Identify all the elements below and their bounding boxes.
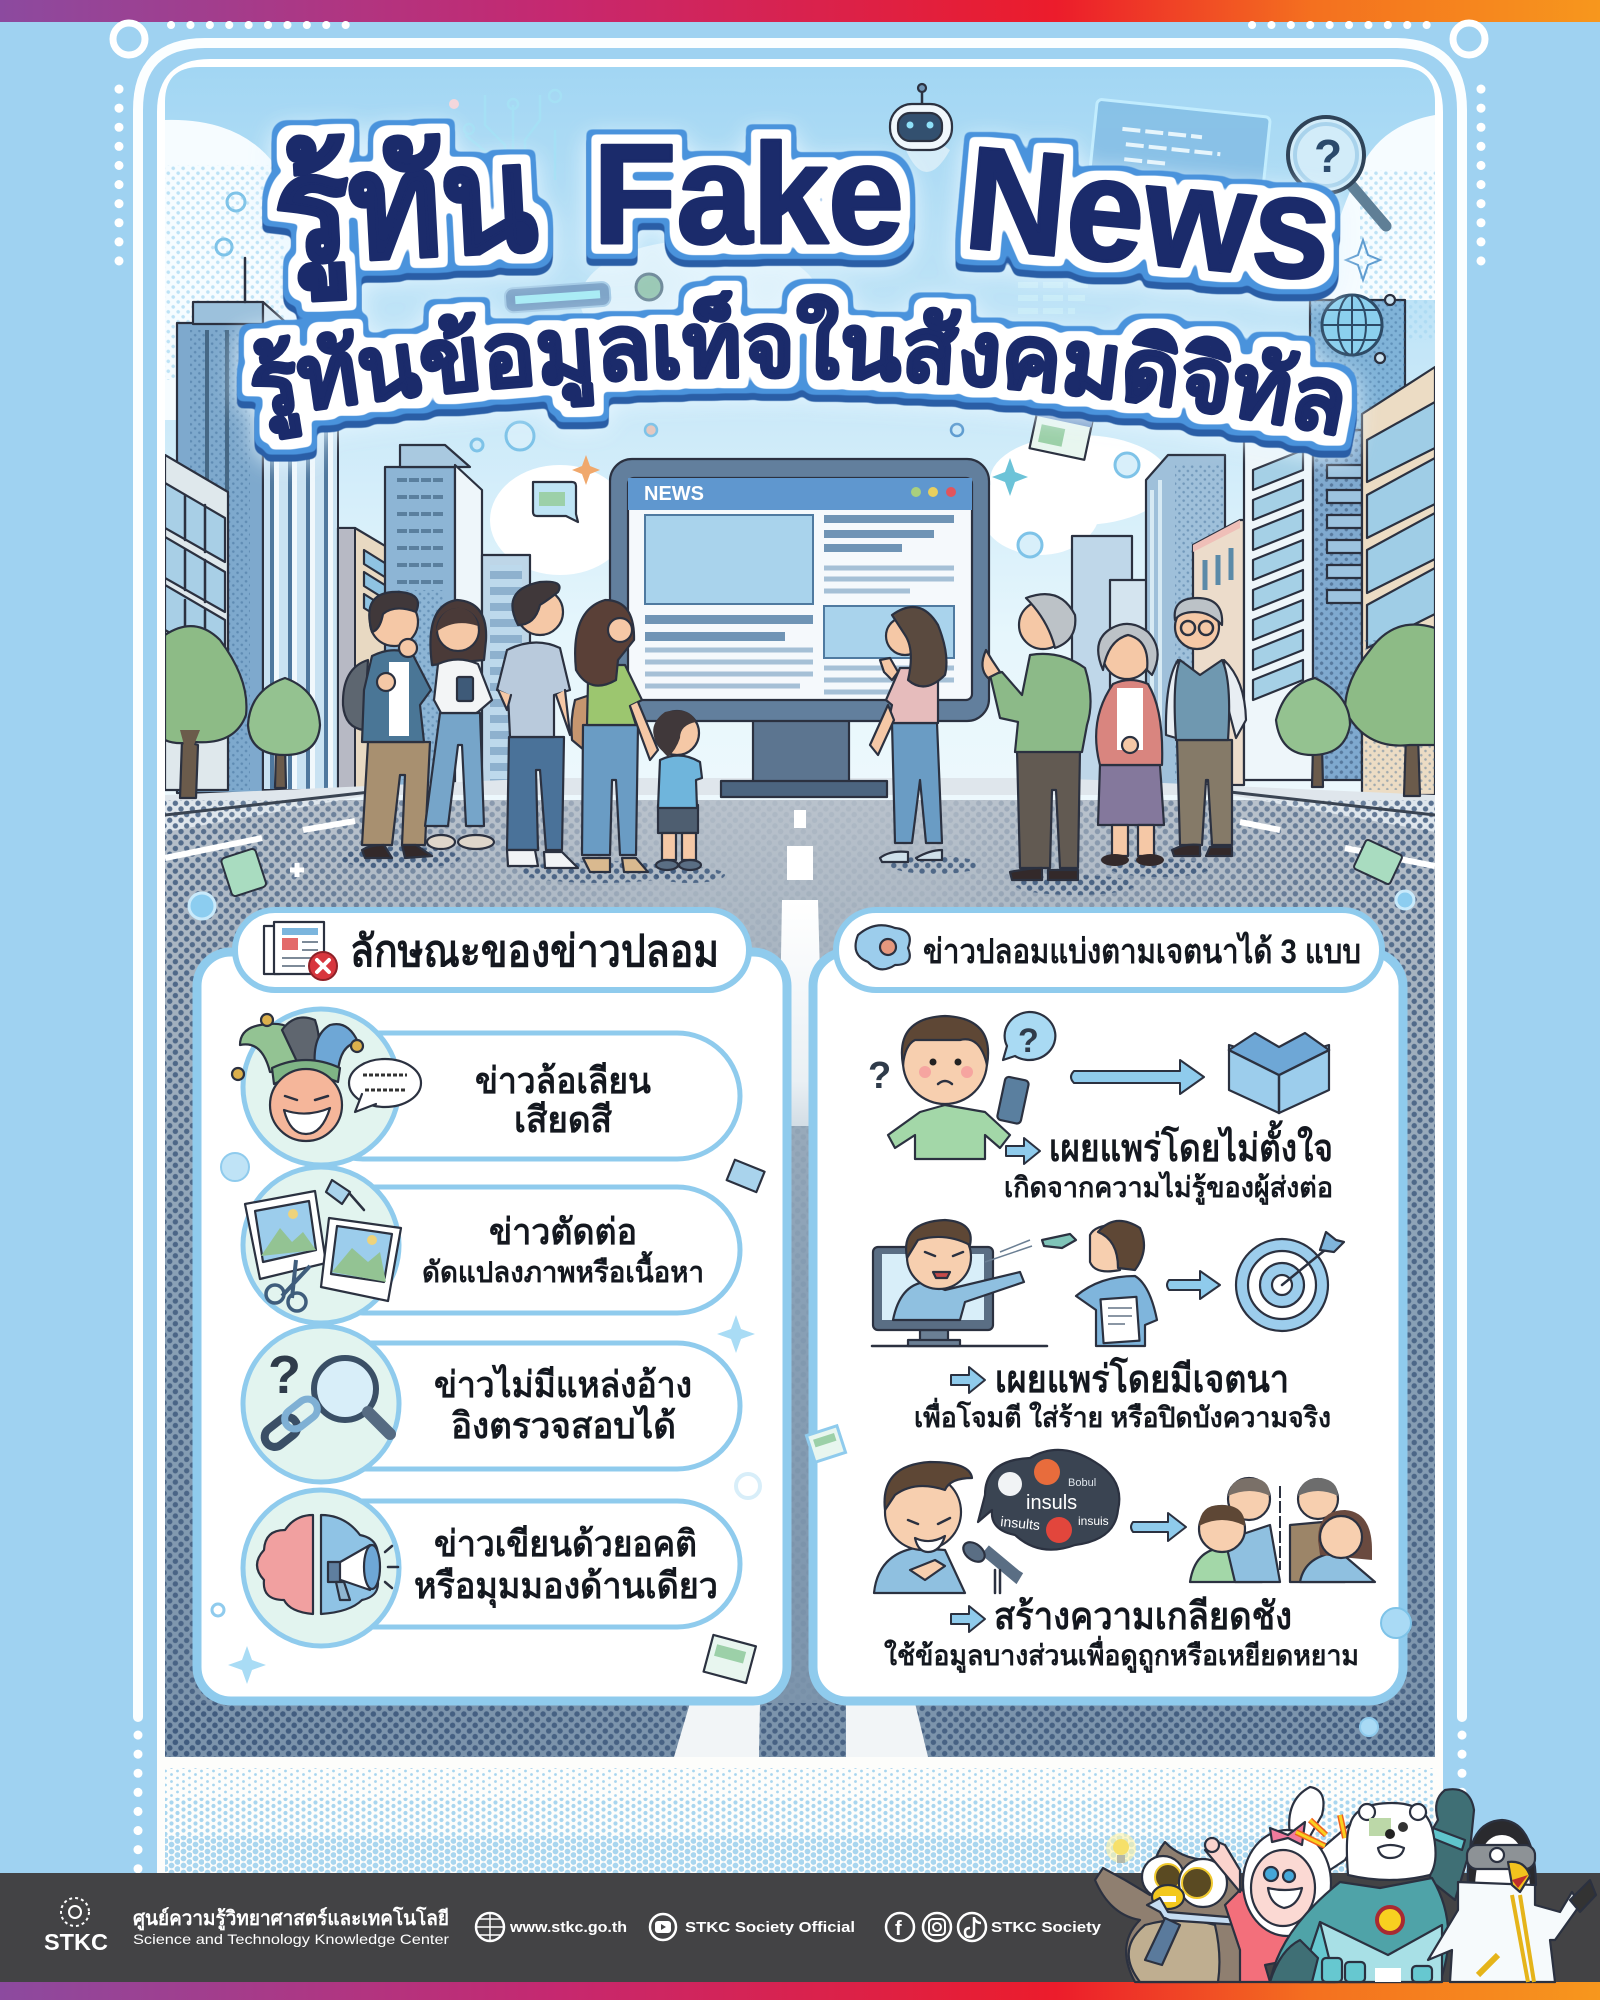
type 3 heading: สร้างความเกลียดชัง	[994, 1596, 1292, 1638]
boy smirking	[874, 1462, 972, 1593]
small arrow	[1006, 1138, 1040, 1164]
icon: magnifying glass with question mark: ?	[1314, 130, 1342, 182]
person: man in grey shirt, back view	[497, 582, 578, 868]
row 1: satire	[232, 1009, 740, 1165]
icon: magnifying glass with question mark	[1288, 117, 1386, 226]
icon: open box	[1229, 1033, 1329, 1113]
news monitor	[610, 459, 989, 797]
small arrow	[951, 1606, 985, 1632]
icon: light bulb	[1106, 1833, 1136, 1863]
person: man in blue jacket with backpack	[343, 592, 432, 858]
row 3: no source: อิงตรวจสอบได้	[451, 1404, 676, 1446]
footer organisation name: ศูนย์ความรู้วิทยาศาสตร์และเทคโนโลยี	[133, 1906, 449, 1932]
title	[220, 114, 1376, 479]
title: News	[959, 116, 1338, 311]
icon: target with dart	[1236, 1232, 1344, 1331]
footer website: www.stkc.go.th	[509, 1919, 627, 1936]
icon: globe	[1322, 295, 1395, 363]
type 2 description: เพื่อโจมตี ใส่ร้าย หรือปิดบังความจริง	[914, 1397, 1331, 1433]
dark speech cloud with insults: insults	[1000, 1513, 1041, 1533]
panel header: three types	[836, 910, 1382, 990]
second person with paper	[1076, 1221, 1157, 1346]
type 1: unintentional	[868, 1012, 1333, 1205]
row 4 text: ข่าวเขียนด้วยอคติ	[434, 1523, 697, 1564]
monitor with angry man	[872, 1220, 1076, 1346]
clouds	[165, 115, 1435, 575]
mascot: penguin in lab coat	[1428, 1820, 1596, 1982]
person: woman in white shirt	[425, 600, 494, 849]
footer youtube: STKC Society Official	[685, 1919, 855, 1936]
footer youtube	[650, 1914, 855, 1940]
type 1 heading: เผยแพร่โดยไม่ตั้งใจ	[1049, 1120, 1333, 1170]
footer logo	[44, 1898, 108, 1955]
mascot: rabbit	[1205, 1787, 1365, 1982]
arrow	[1167, 1271, 1220, 1299]
boy with phone: ?	[868, 1055, 891, 1097]
person: old man in green sweater, back view	[982, 594, 1091, 880]
footer organisation name: Science and Technology Knowledge Center	[133, 1931, 449, 1947]
floating tech decorations	[216, 90, 1403, 897]
white dotted lower band	[157, 1750, 1443, 1875]
row 4: biased	[243, 1490, 740, 1646]
type 1 description: เกิดจากความไม่รู้ของผู้ส่งต่อ	[1004, 1171, 1333, 1205]
dark speech cloud with insults: insuls	[1026, 1492, 1077, 1514]
decorative outer frame	[113, 23, 1485, 1873]
icon: photos, scissors and glue	[245, 1180, 401, 1311]
icon: brain network	[856, 925, 910, 969]
person: woman in pink, back view	[870, 607, 946, 862]
buildings left	[165, 258, 530, 793]
panel: characteristics of fake news	[197, 910, 787, 1701]
dark speech cloud with insults: Bobul	[1068, 1477, 1096, 1489]
row 2: doctored	[243, 1167, 740, 1323]
top gradient bar	[0, 0, 1600, 22]
mascot: bear in teal suit	[1270, 1789, 1474, 1982]
mascot: owl	[1095, 1842, 1245, 1982]
main city illustration	[165, 67, 1435, 1757]
panel: three intent types	[813, 910, 1403, 1701]
row 1 text: ข่าวล้อเลียน	[475, 1060, 651, 1101]
person: old woman	[1096, 624, 1164, 866]
type 2 heading: เผยแพร่โดยมีเจตนา	[995, 1356, 1289, 1401]
type 2: intentional	[872, 1220, 1344, 1433]
row 4: biased: หรือมุมมองด้านเดียว	[414, 1565, 718, 1609]
icon: magnifier, chain and question	[261, 1345, 390, 1451]
row 3: no source	[243, 1326, 740, 1482]
sky	[165, 67, 1435, 827]
icon: microphone	[960, 1538, 1018, 1593]
icon: magnifier, chain and question: ?	[268, 1345, 301, 1405]
footer bar	[0, 1873, 1600, 2000]
footer social: f	[895, 1918, 902, 1940]
decorative bubbles around panels	[189, 891, 1414, 1736]
ground shadows	[340, 847, 1210, 895]
arguing group	[1190, 1478, 1375, 1582]
boy with phone	[868, 1012, 1055, 1159]
boy with phone: ?	[1018, 1022, 1039, 1060]
small arrow	[951, 1367, 985, 1393]
header text: characteristics: ลักษณะของข่าวปลอม	[350, 927, 719, 976]
news monitor: NEWS	[644, 483, 704, 505]
row 1: satire: เสียดสี	[514, 1099, 612, 1140]
person: woman in green top, back view	[571, 600, 658, 872]
panel header: characteristics	[235, 910, 749, 990]
footer logo: STKC	[44, 1929, 108, 1955]
type 3 description: ใช้ข้อมูลบางส่วนเพื่อดูถูกหรือเหยียดหยาม	[884, 1635, 1359, 1673]
title: รู้ทัน	[270, 116, 541, 303]
row 3 text: ข่าวไม่มีแหล่งอ้าง	[434, 1363, 692, 1405]
row 2: doctored: ดัดแปลงภาพหรือเนื้อหา	[422, 1250, 704, 1289]
type 3: hate	[874, 1450, 1375, 1673]
road surface	[165, 778, 1435, 1757]
person: old man in vest	[1166, 598, 1246, 856]
mascots	[1095, 1787, 1596, 1982]
dark speech cloud with insults	[978, 1450, 1119, 1550]
person: child	[653, 710, 702, 870]
trees	[165, 624, 1435, 798]
robot icon	[890, 84, 952, 172]
arrow	[1131, 1513, 1186, 1541]
dark speech cloud with insults: insuis	[1078, 1514, 1109, 1528]
title: รู้ทันข้อมูลเท็จในสังคมดิจิทัล	[220, 275, 1376, 479]
icon: newspaper with red x	[264, 922, 337, 980]
icon: brain and megaphone	[257, 1515, 398, 1614]
icon: jester	[232, 1014, 421, 1141]
title: Fake	[593, 115, 904, 274]
footer social	[886, 1913, 1102, 1941]
header text: three types: ข่าวปลอมแบ่งตามเจตนาได้ 3 แบบ	[923, 931, 1361, 971]
buildings right	[1072, 300, 1435, 795]
arrow	[1071, 1060, 1204, 1094]
row 2 text: ข่าวตัดต่อ	[489, 1211, 637, 1252]
footer organisation name	[133, 1906, 449, 1947]
footer website	[476, 1913, 627, 1941]
footer social: STKC Society	[991, 1919, 1102, 1936]
